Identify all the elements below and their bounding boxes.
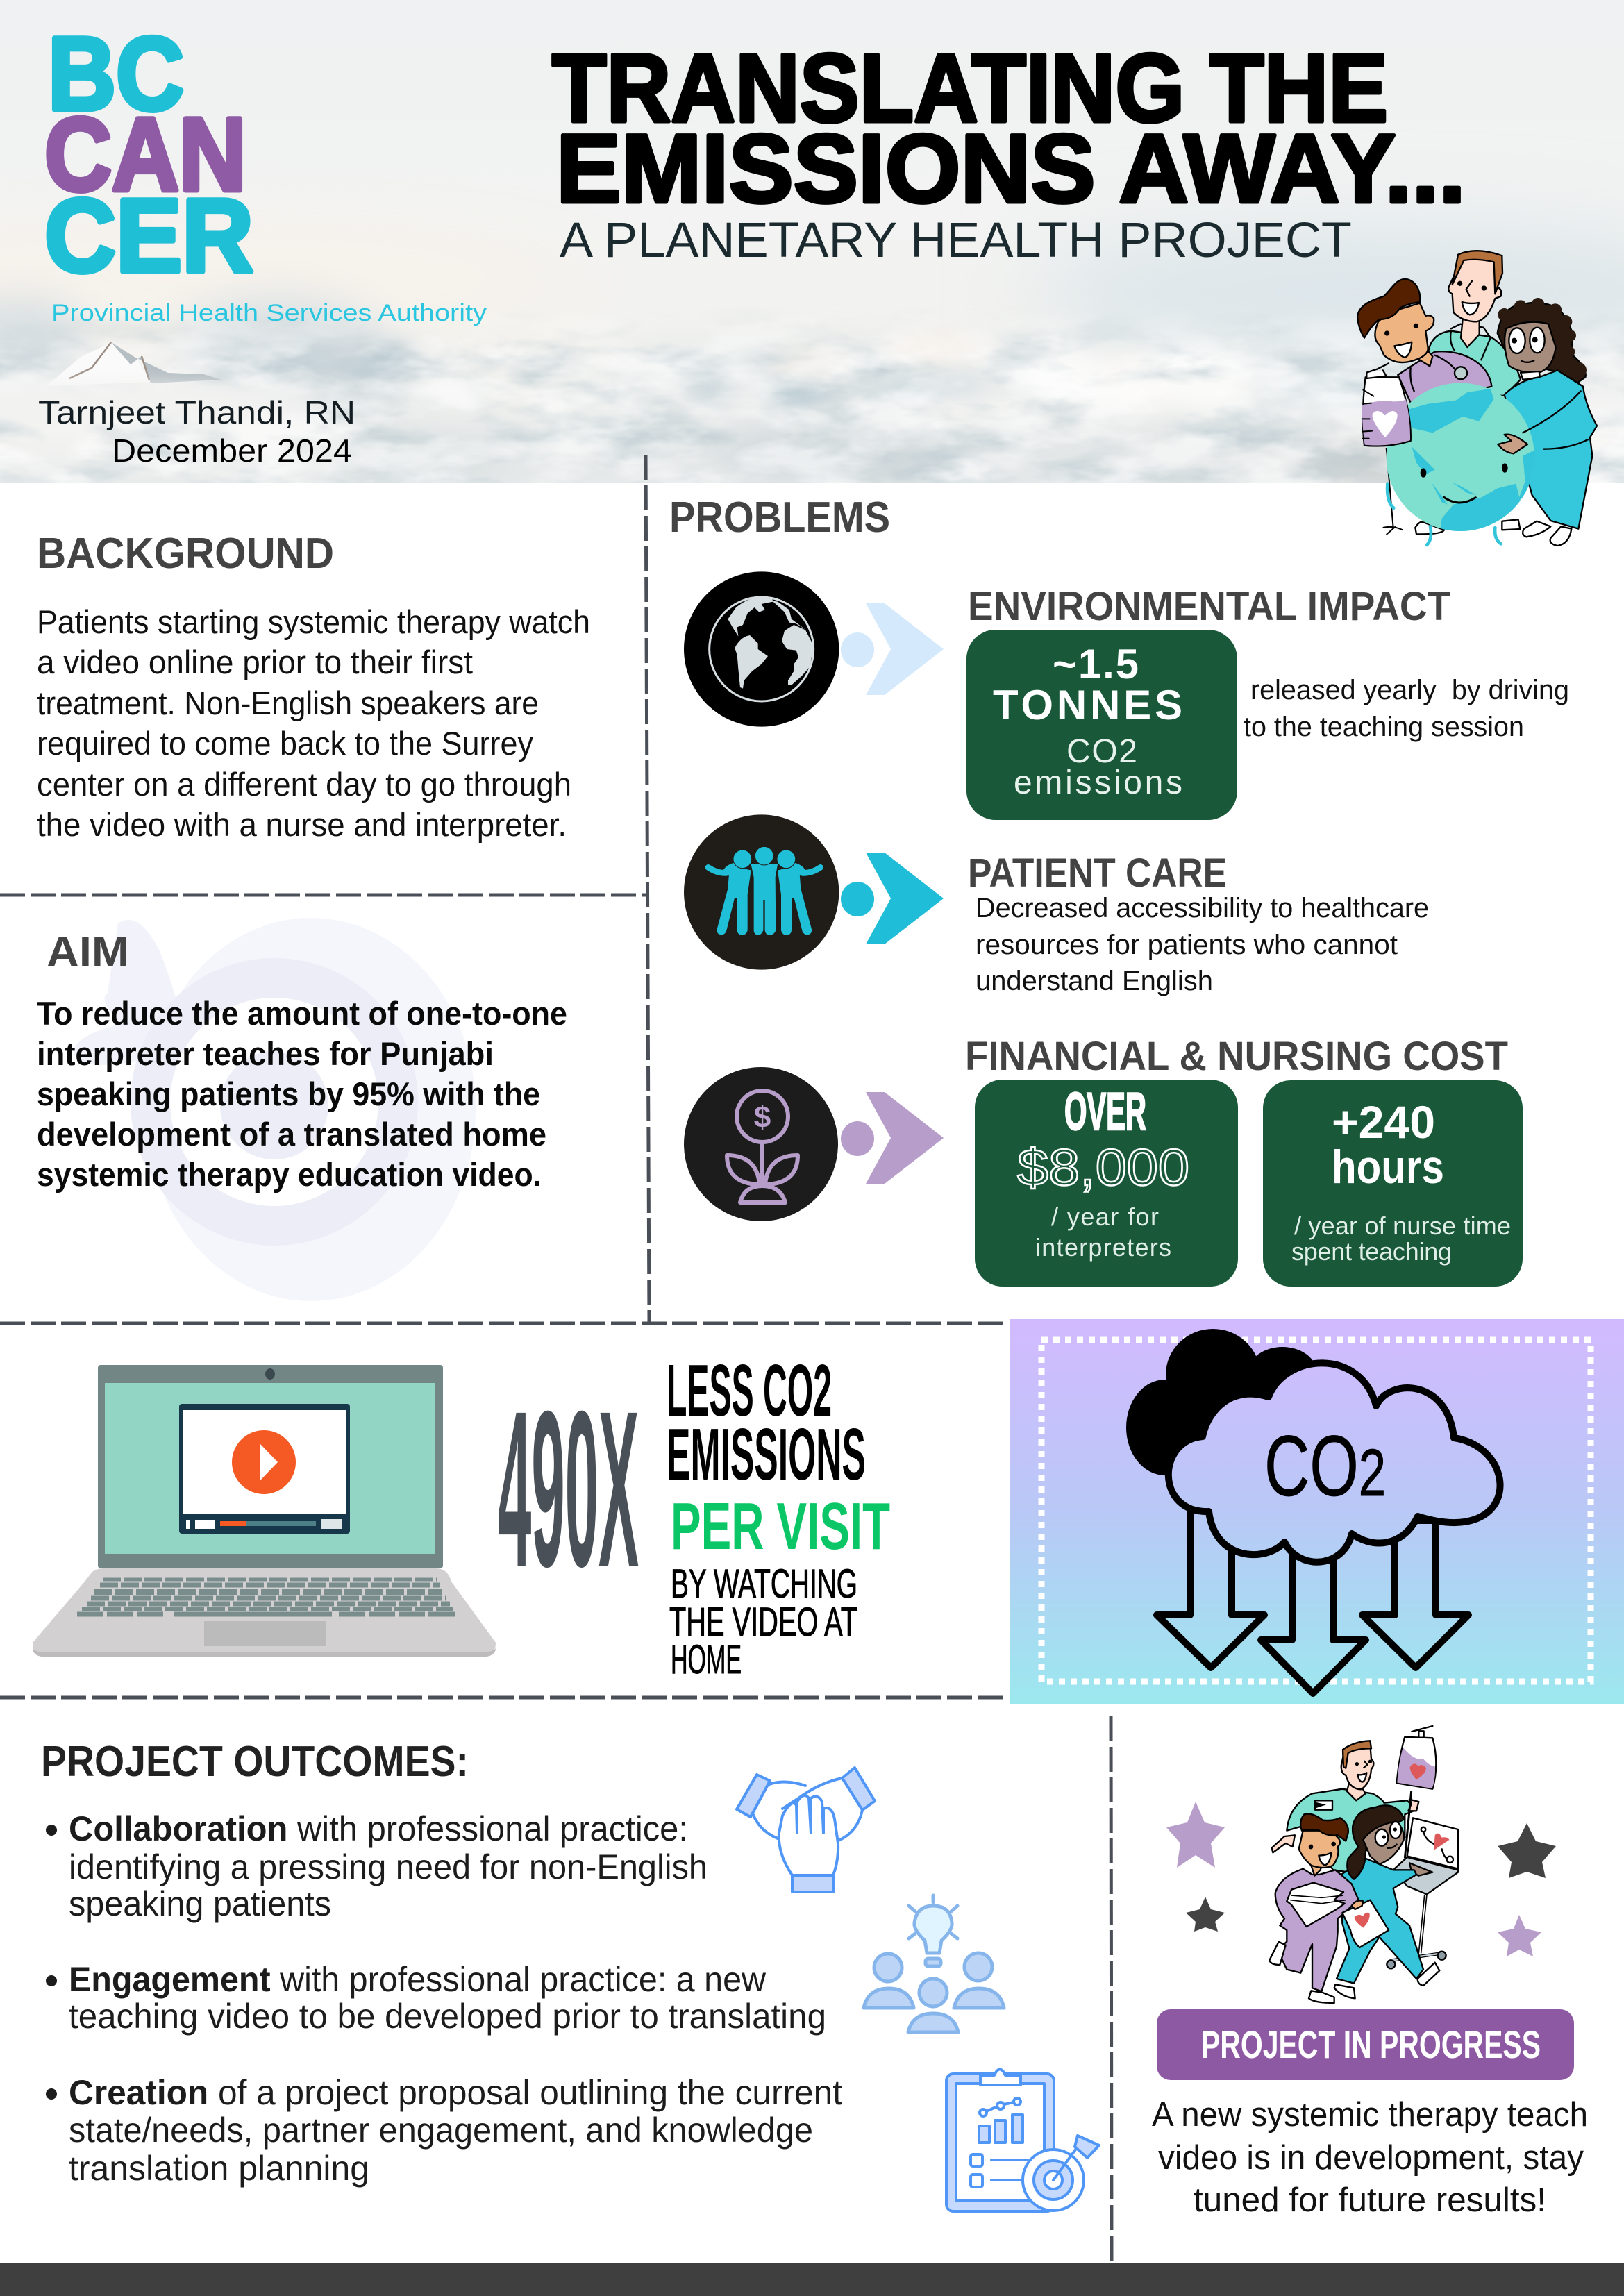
stat card: interpreter cost: [975, 1080, 1238, 1287]
outcome: collaboration: [46, 1809, 708, 1923]
logo: BC Cancer: BC: [48, 15, 184, 132]
environmental text: to the teaching session: [1244, 712, 1524, 742]
outcome: creation: translation planning: [69, 2149, 369, 2188]
outcome: engagement: Engagement with professional practice: a new: [69, 1960, 767, 1999]
mountain peak: [0, 342, 326, 424]
arrow: patient care: [841, 853, 944, 944]
stat card: tonnes CO2: TONNES: [993, 682, 1182, 728]
aim text: systemic therapy education video.: [37, 1156, 542, 1193]
background text: [37, 603, 590, 843]
patient care text: [976, 893, 1429, 996]
outcome: engagement: [46, 1960, 826, 2036]
stat card: tonnes CO2: emissions: [1014, 764, 1182, 801]
project status text: video is in development, stay: [1158, 2139, 1584, 2177]
background text: a video online prior to their first: [37, 644, 473, 680]
stat card: nurse hours: hours: [1332, 1141, 1444, 1193]
patient care text: resources for patients who cannot: [976, 930, 1398, 960]
stat text: [667, 1350, 890, 1682]
project status text: [1152, 2096, 1588, 2219]
badge: project in progress: [1157, 2009, 1574, 2080]
stat card: nurse hours: / year of nurse time: [1294, 1212, 1511, 1240]
aim text: development of a translated home: [37, 1116, 546, 1153]
stat card: nurse hours: +240: [1332, 1096, 1435, 1148]
background text: treatment. Non-English speakers are: [37, 685, 539, 721]
stat card: nurse hours: [1263, 1080, 1523, 1287]
outcome: engagement: teaching video to be developed prior to translating: [69, 1997, 826, 2036]
outcome: creation: state/needs, partner engagement, and knowledge: [69, 2111, 813, 2150]
icon: money plant: $: [754, 1100, 771, 1134]
illustration: nurses running: [1269, 1726, 1458, 2003]
stat text: BY WATCHING: [671, 1561, 857, 1607]
icon: small purple star: [1498, 1915, 1541, 1956]
patient care text: understand English: [976, 966, 1213, 996]
icon: clipboard with target: [946, 2069, 1099, 2211]
stat card: interpreter cost: $8,000: [1017, 1139, 1189, 1196]
title: TRANSLATING THE: [552, 33, 1388, 142]
outcome: collaboration: Collaboration with professional practice:: [69, 1809, 688, 1848]
aim text: [37, 995, 567, 1193]
aim text: interpreter teaches for Punjabi: [37, 1035, 494, 1072]
icon: large purple star: [1166, 1802, 1225, 1868]
logo: BC Cancer: CAN: [44, 96, 246, 212]
panel: CO2 reduction graphic: [1010, 1319, 1624, 1704]
stat card: tonnes CO2: [966, 630, 1237, 820]
background text: the video with a nurse and interpreter.: [37, 806, 567, 843]
watermark: target with arrow: [73, 918, 476, 1301]
stat card: tonnes CO2: CO2: [1066, 733, 1137, 770]
project status text: tuned for future results!: [1194, 2181, 1546, 2219]
stat text: LESS CO2: [667, 1350, 832, 1432]
project status text: A new systemic therapy teach: [1152, 2096, 1588, 2134]
icon: money plant: [684, 1067, 838, 1221]
stat card: nurse hours: spent teaching: [1291, 1237, 1452, 1266]
icon: hands together: [737, 1768, 875, 1892]
arrow: environmental: [841, 603, 944, 695]
stat text: THE VIDEO AT: [669, 1600, 857, 1645]
text: 490X: [498, 1364, 639, 1613]
author and date: [38, 394, 355, 469]
stat card: interpreter cost: OVER: [1064, 1082, 1146, 1141]
stat card: tonnes CO2: ~1.5: [1053, 641, 1139, 687]
background text: required to come back to the Surrey: [37, 725, 533, 762]
heading: problems: PROBLEMS: [669, 494, 890, 542]
stat text: PER VISIT: [671, 1489, 890, 1564]
subtitle: A PLANETARY HEALTH PROJECT: [560, 213, 1352, 268]
heading: financial and nursing cost: FINANCIAL & NURSING COST: [965, 1034, 1508, 1079]
footer bar: [0, 2263, 1624, 2296]
icon: globe: [684, 571, 839, 727]
background text: Patients starting systemic therapy watch: [37, 603, 590, 640]
stat card: interpreter cost: interpreters: [1035, 1233, 1171, 1262]
icon: small dark star: [1186, 1897, 1225, 1932]
environmental text: released yearly by driving: [1250, 675, 1569, 705]
icon: idea bulb and team: [864, 1895, 1004, 2032]
heading: aim: AIM: [47, 928, 129, 976]
outcome: collaboration: speaking patients: [69, 1884, 331, 1923]
outcome: collaboration: identifying a pressing need for non-English: [69, 1847, 708, 1886]
stat text: EMISSIONS: [667, 1414, 866, 1495]
icon: people: [684, 814, 839, 970]
environmental text: [1244, 675, 1569, 742]
stat text: HOME: [671, 1637, 742, 1682]
panel: CO2 reduction graphic: CO2: [1264, 1419, 1386, 1514]
icon: laptop with video player: [33, 1365, 496, 1657]
header sky background with clouds: [0, 0, 1624, 493]
heading: patient care: PATIENT CARE: [968, 850, 1227, 896]
stat card: interpreter cost: / year for: [1051, 1203, 1159, 1231]
author and date: December 2024: [112, 433, 352, 469]
heading: background: BACKGROUND: [37, 530, 334, 578]
aim text: To reduce the amount of one-to-one: [37, 995, 567, 1032]
logo subtitle: Provincial Health Services Authority: [51, 300, 487, 326]
author and date: Tarnjeet Thandi, RN: [38, 394, 355, 430]
aim text: speaking patients by 95% with the: [37, 1075, 540, 1112]
heading: project outcomes: PROJECT OUTCOMES:: [41, 1738, 469, 1786]
section divider lines: [0, 455, 1112, 2263]
icon: large dark star: [1498, 1823, 1556, 1878]
background text: center on a different day to go through: [37, 766, 571, 803]
outcome: creation: [46, 2073, 842, 2188]
title: [552, 33, 1466, 223]
title: EMISSIONS AWAY...: [556, 114, 1466, 223]
illustration: nurses hugging the earth: [1357, 251, 1597, 546]
outcome: creation: Creation of a project proposal outlining the current: [69, 2073, 842, 2112]
heading: environmental impact: ENVIRONMENTAL IMPACT: [968, 584, 1450, 629]
logo: BC Cancer: CER: [44, 177, 253, 294]
logo: BC Cancer: [44, 15, 253, 294]
arrow: financial: [841, 1092, 944, 1184]
patient care text: Decreased accessibility to healthcare: [976, 893, 1429, 923]
